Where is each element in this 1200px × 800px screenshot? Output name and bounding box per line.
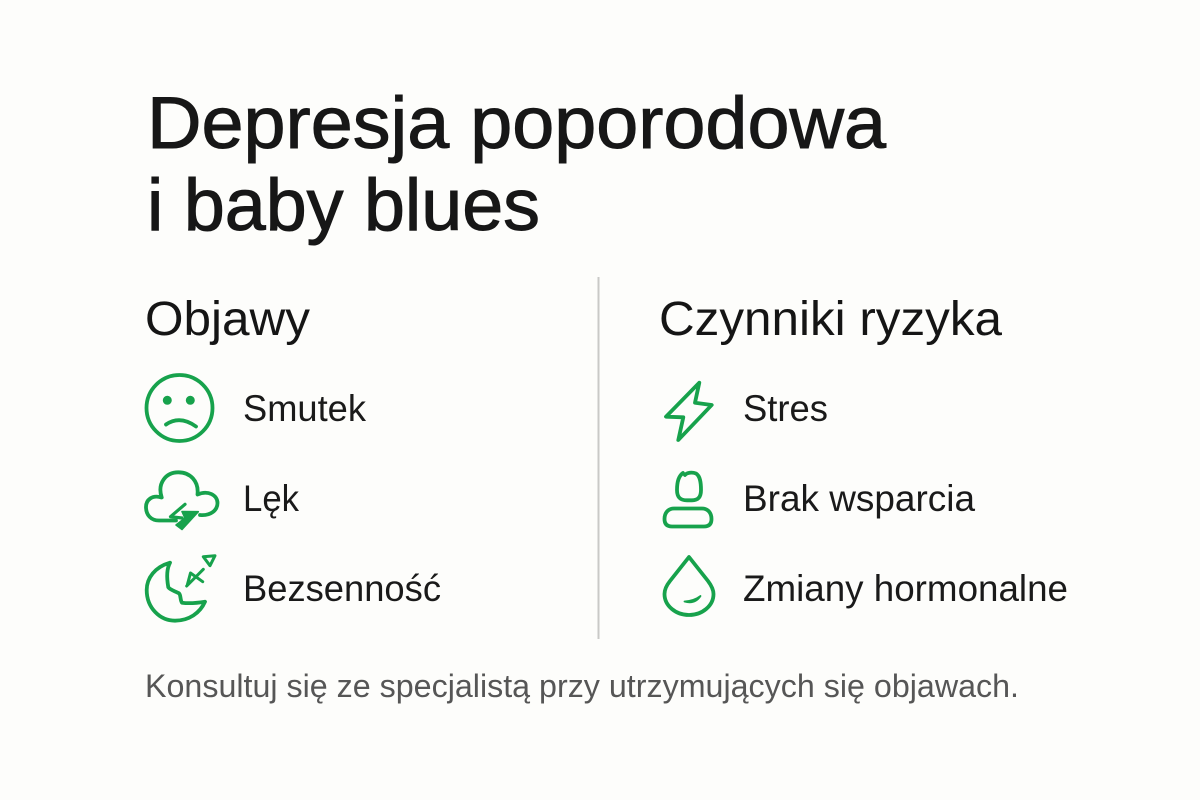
title: i baby blues [147, 165, 540, 246]
icon: sad face [146, 375, 212, 441]
panel: objawy [145, 293, 441, 621]
label: lek: Lęk [243, 478, 299, 519]
title [147, 83, 886, 246]
label: stres: Stres [743, 388, 828, 429]
label: zmiany hormonalne: Zmiany hormonalne [743, 568, 1068, 609]
icon: lightning bolt [666, 383, 712, 440]
label: brak wsparcia: Brak wsparcia [743, 478, 975, 519]
heading: objawy: Objawy [145, 293, 310, 346]
label: bezsennosc: Bezsenność [243, 568, 441, 609]
icon: moon and satellite [147, 556, 215, 621]
heading: czynniki ryzyka: Czynniki ryzyka [659, 293, 1002, 346]
label: smutek: Smutek [243, 388, 366, 429]
title: Depresja poporodowa [147, 83, 886, 164]
icon: person [664, 473, 712, 526]
panel: czynniki ryzyka [659, 293, 1068, 615]
icon: storm cloud [146, 472, 218, 530]
footer note: Konsultuj się ze specjalistą przy utrzymujących się objawach. [145, 668, 1019, 704]
icon: water drop [664, 557, 714, 615]
